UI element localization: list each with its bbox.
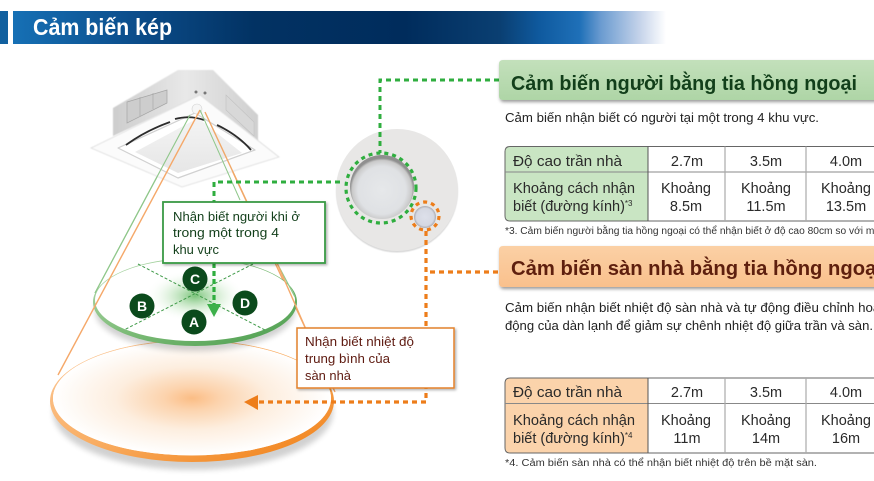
arrow: to floor	[244, 231, 499, 410]
footnote 4: *4. Cảm biến sàn nhà có thể nhận biết nhiệt độ trên bề mặt sàn.	[505, 457, 817, 469]
callout: floor temperature	[297, 328, 454, 388]
table: floor sensor: 2.7m	[671, 385, 703, 401]
human detection zone (green)	[93, 115, 305, 351]
callout: human detection: Nhận biết người khi ở	[173, 209, 300, 224]
table: floor sensor: Khoảng	[741, 413, 791, 429]
heading: infrared human sensor: Cảm biến người bằng tia hồng ngoại	[511, 71, 857, 95]
title bar	[0, 11, 666, 44]
table: human sensor: Khoảng	[821, 181, 871, 197]
floor temperature zone (orange)	[50, 112, 335, 470]
description: human sensor: Cảm biến nhận biết có người tại một trong 4 khu vực.	[505, 111, 819, 125]
callout: human detection: trong một trong 4	[173, 225, 279, 240]
callout: floor temperature: sàn nhà	[305, 368, 352, 383]
table: human sensor: *3	[625, 199, 633, 208]
table: floor sensor: Khoảng	[661, 413, 711, 429]
table: floor sensor: biết (đường kính)	[513, 431, 625, 447]
table: floor sensor: 4.0m	[830, 385, 862, 401]
table: human sensor: Khoảng	[661, 181, 711, 197]
table: human sensor: Độ cao trần nhà	[513, 154, 623, 170]
table: human sensor: 13.5m	[826, 199, 866, 215]
green dashed connectors	[214, 80, 499, 202]
table: floor sensor: Khoảng	[821, 413, 871, 429]
description: floor sensor: động của dàn lạnh để giảm sự chênh nhiệt độ giữa trần và sàn.	[505, 319, 873, 333]
table: floor sensor: 11m	[673, 431, 701, 447]
table: human sensor: 8.5m	[670, 199, 702, 215]
ceiling cassette unit	[58, 70, 279, 375]
callout: floor temperature: Nhận biết nhiệt độ	[305, 334, 414, 349]
zone markers A B C D: C	[190, 271, 200, 287]
zone markers A B C D: D	[240, 295, 250, 311]
table: human sensor: Khoảng cách nhận	[513, 181, 635, 197]
heading: infrared floor sensor: Cảm biến sàn nhà bằng tia hồng ngoại	[511, 256, 874, 280]
table: floor sensor: 3.5m	[750, 385, 782, 401]
table: human sensor	[505, 146, 874, 221]
table: floor sensor: Độ cao trần nhà	[513, 385, 623, 401]
table: human sensor: 4.0m	[830, 154, 862, 170]
table: floor sensor	[505, 378, 874, 453]
table: floor sensor: 14m	[752, 431, 780, 447]
zone markers A B C D: A	[189, 314, 199, 330]
table: floor sensor: 16m	[832, 431, 860, 447]
zone markers A B C D	[130, 266, 258, 334]
heading: infrared human sensor	[499, 60, 874, 100]
table: floor sensor: Khoảng cách nhận	[513, 413, 635, 429]
callout: floor temperature: trung bình của	[305, 351, 391, 366]
zone markers A B C D: B	[137, 298, 147, 314]
table: floor sensor: *4	[625, 431, 633, 440]
arrow: to detection zone	[207, 263, 221, 317]
callout: human detection: khu vực	[173, 242, 219, 257]
heading: infrared floor sensor	[499, 246, 874, 287]
title: Cảm biến kép	[33, 14, 172, 40]
table: human sensor: 3.5m	[750, 154, 782, 170]
sensor disc close-up	[336, 129, 458, 252]
callout: human detection	[163, 202, 325, 263]
table: human sensor: 11.5m	[746, 199, 786, 215]
table: human sensor: 2.7m	[671, 154, 703, 170]
description: floor sensor	[505, 301, 874, 333]
description: floor sensor: Cảm biến nhận biết nhiệt độ sàn nhà và tự động điều chỉnh hoạt	[505, 301, 874, 315]
table: human sensor: Khoảng	[741, 181, 791, 197]
table: human sensor: biết (đường kính)	[513, 199, 625, 215]
